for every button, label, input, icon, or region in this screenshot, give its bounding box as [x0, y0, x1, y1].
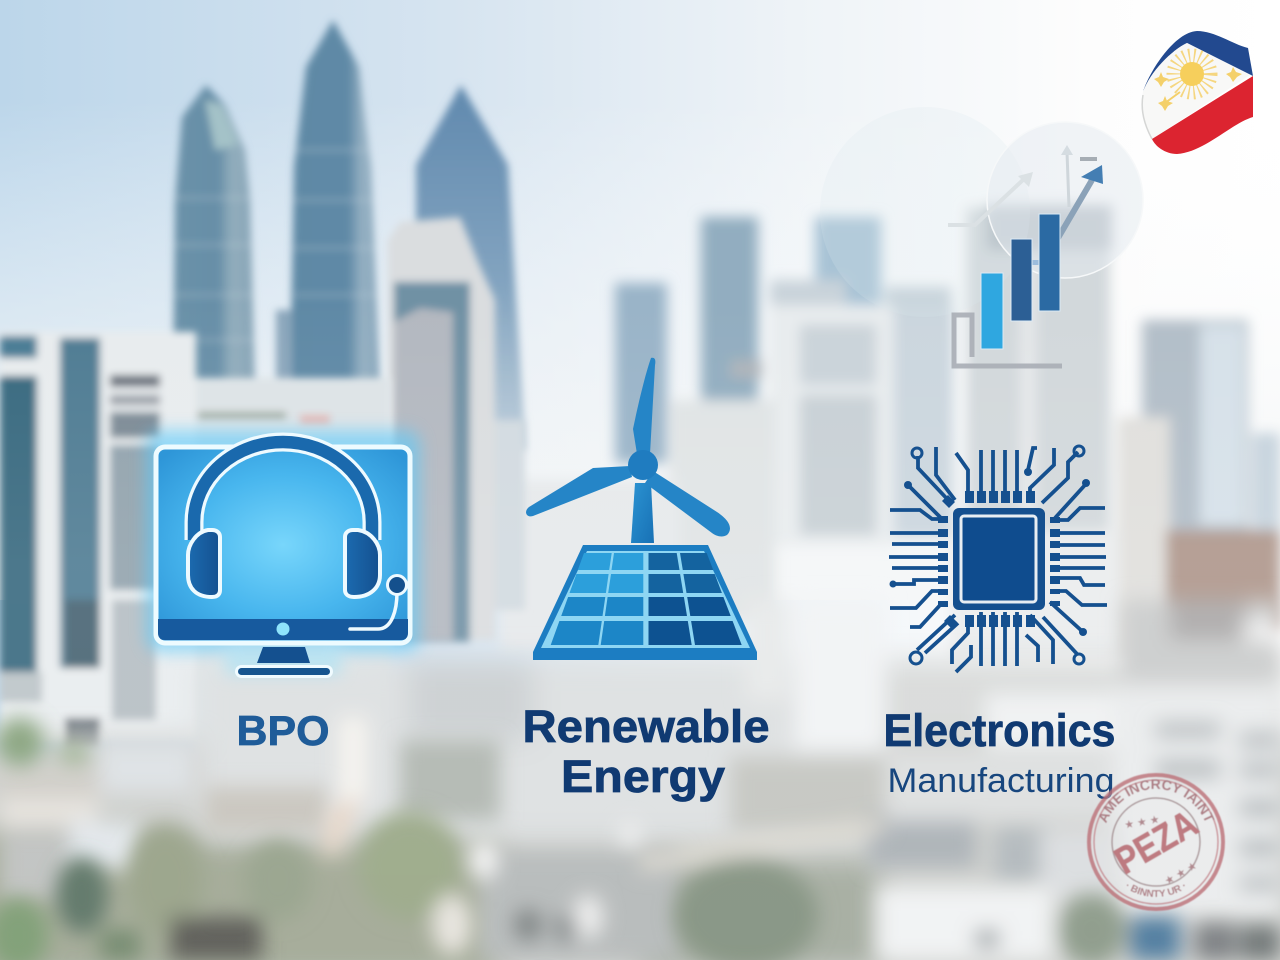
stamp ring text: · BINNTY UR ·: [1126, 884, 1185, 898]
solar panel: [533, 545, 757, 660]
turbine tower: [631, 483, 654, 543]
chart axis: [954, 315, 1062, 366]
microphone: [350, 592, 397, 629]
monitor screen: [156, 447, 410, 643]
faded background circles: [820, 107, 1143, 317]
Electronics Manufacturing icon: [884, 446, 1116, 800]
chart bars: [981, 214, 1060, 349]
flag stars: [1154, 67, 1242, 111]
mid buildings: [388, 217, 525, 642]
lower city: [0, 660, 1280, 960]
processor chip: [953, 508, 1045, 610]
label: Electronics Manufacturing: Electronics: [884, 705, 1116, 756]
faded arrows: [948, 145, 1073, 225]
circuit traces: [889, 447, 1107, 672]
stamp wordmark: PEZA: [1108, 803, 1205, 883]
label: Renewable Energy: Renewable: [522, 701, 770, 752]
turbine blades: [526, 358, 730, 536]
monitor bar: [158, 619, 408, 640]
Renewable Energy icon: [522, 358, 770, 802]
stamp stars: [1123, 814, 1200, 888]
decorative flag: Philippines: [1142, 31, 1253, 154]
left buildings: [0, 332, 390, 758]
haze wash: [0, 300, 1280, 960]
label: BPO: BPO: [236, 707, 330, 754]
growth chart icon: [820, 107, 1143, 366]
label: Electronics Manufacturing: [884, 705, 1116, 800]
stamp ring text: [1099, 779, 1214, 898]
monitor stand: [257, 647, 310, 663]
stamp stars: ★ ★ ★: [1123, 814, 1161, 832]
headset: [188, 442, 406, 629]
turbine hub: [628, 450, 658, 480]
circuit terminals: [910, 446, 1084, 664]
label: Renewable Energy: Energy: [561, 751, 725, 802]
rising arrow: [1032, 157, 1103, 265]
flag sun: [1175, 57, 1209, 91]
circuit pads: [890, 468, 1090, 636]
stamp stars: ★ ★ ★: [1163, 859, 1200, 888]
stamp ring text: AME INCRCY IAINT: [1099, 779, 1214, 824]
label: Renewable Energy: [522, 701, 770, 802]
PEZA stamp: [1086, 772, 1226, 912]
BPO icon: [146, 430, 420, 754]
label: Electronics Manufacturing: Manufacturing: [888, 762, 1114, 800]
far towers: [173, 20, 526, 450]
monitor glow: [146, 430, 420, 675]
